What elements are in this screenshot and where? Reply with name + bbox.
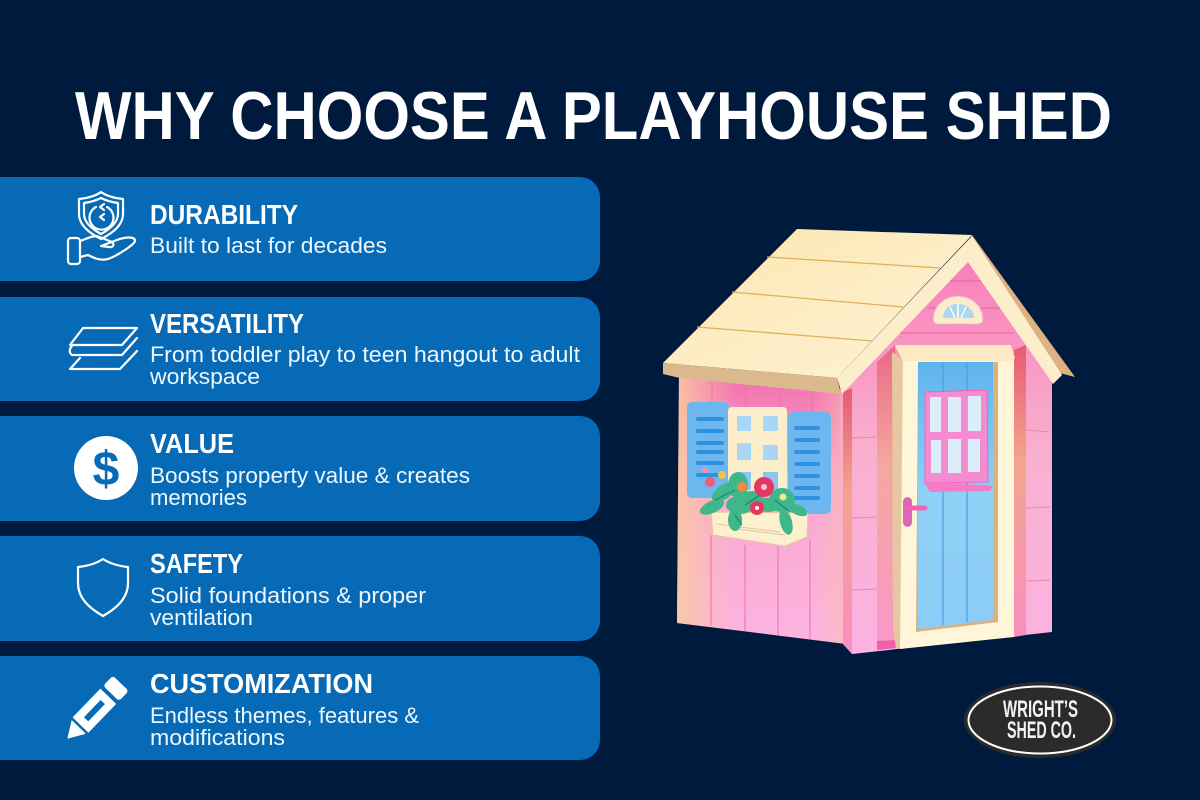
house front wall [840, 255, 1052, 654]
panel: customization [0, 656, 600, 760]
text: versatility description line 2: workspace [149, 364, 260, 389]
panel: durability [0, 177, 600, 281]
door window [923, 390, 993, 492]
text: versatility description: From toddler play to teen hangout to adult [150, 342, 580, 367]
text: value description: Boosts property value & creates [150, 463, 470, 488]
icon: dollar coin: $ [93, 443, 120, 496]
door with frame [892, 345, 1015, 649]
house left wall [677, 375, 846, 644]
text: value description line 2: memories [150, 485, 247, 510]
gable window [933, 296, 983, 324]
illustration: pink playhouse [663, 229, 1075, 654]
heading: versatility: VERSATILITY [150, 308, 304, 339]
text: safety description: Solid foundations & proper [150, 583, 426, 608]
icon: pencil [60, 676, 129, 746]
logo: Wright's Shed Co.: WRIGHT’S [1003, 696, 1078, 723]
icon: shield [78, 559, 128, 616]
icon: shield on open hand [68, 192, 135, 264]
roof [663, 229, 1075, 394]
logo: Wright's Shed Co.: SHED CO. [1007, 717, 1076, 744]
panel: value [0, 416, 600, 521]
panel: safety [0, 536, 600, 641]
text: customization description line 2: modifications [150, 725, 285, 750]
icon: dollar coin [74, 436, 138, 500]
logo: Wright's Shed Co. [964, 682, 1116, 758]
side window with shutters [687, 402, 831, 514]
heading: customization: CUSTOMIZATION [150, 668, 373, 699]
flower box [698, 467, 809, 546]
text: customization description: Endless themes, features & [150, 703, 419, 728]
text: durability description: Built to last for decades [150, 233, 387, 258]
text: safety description line 2: ventilation [150, 605, 253, 630]
heading: safety: SAFETY [150, 548, 243, 579]
icon: stacked layers [70, 328, 137, 369]
panel: versatility [0, 297, 600, 401]
heading: durability: DURABILITY [150, 199, 298, 230]
door handle [903, 497, 925, 527]
heading: value: VALUE [150, 428, 234, 459]
